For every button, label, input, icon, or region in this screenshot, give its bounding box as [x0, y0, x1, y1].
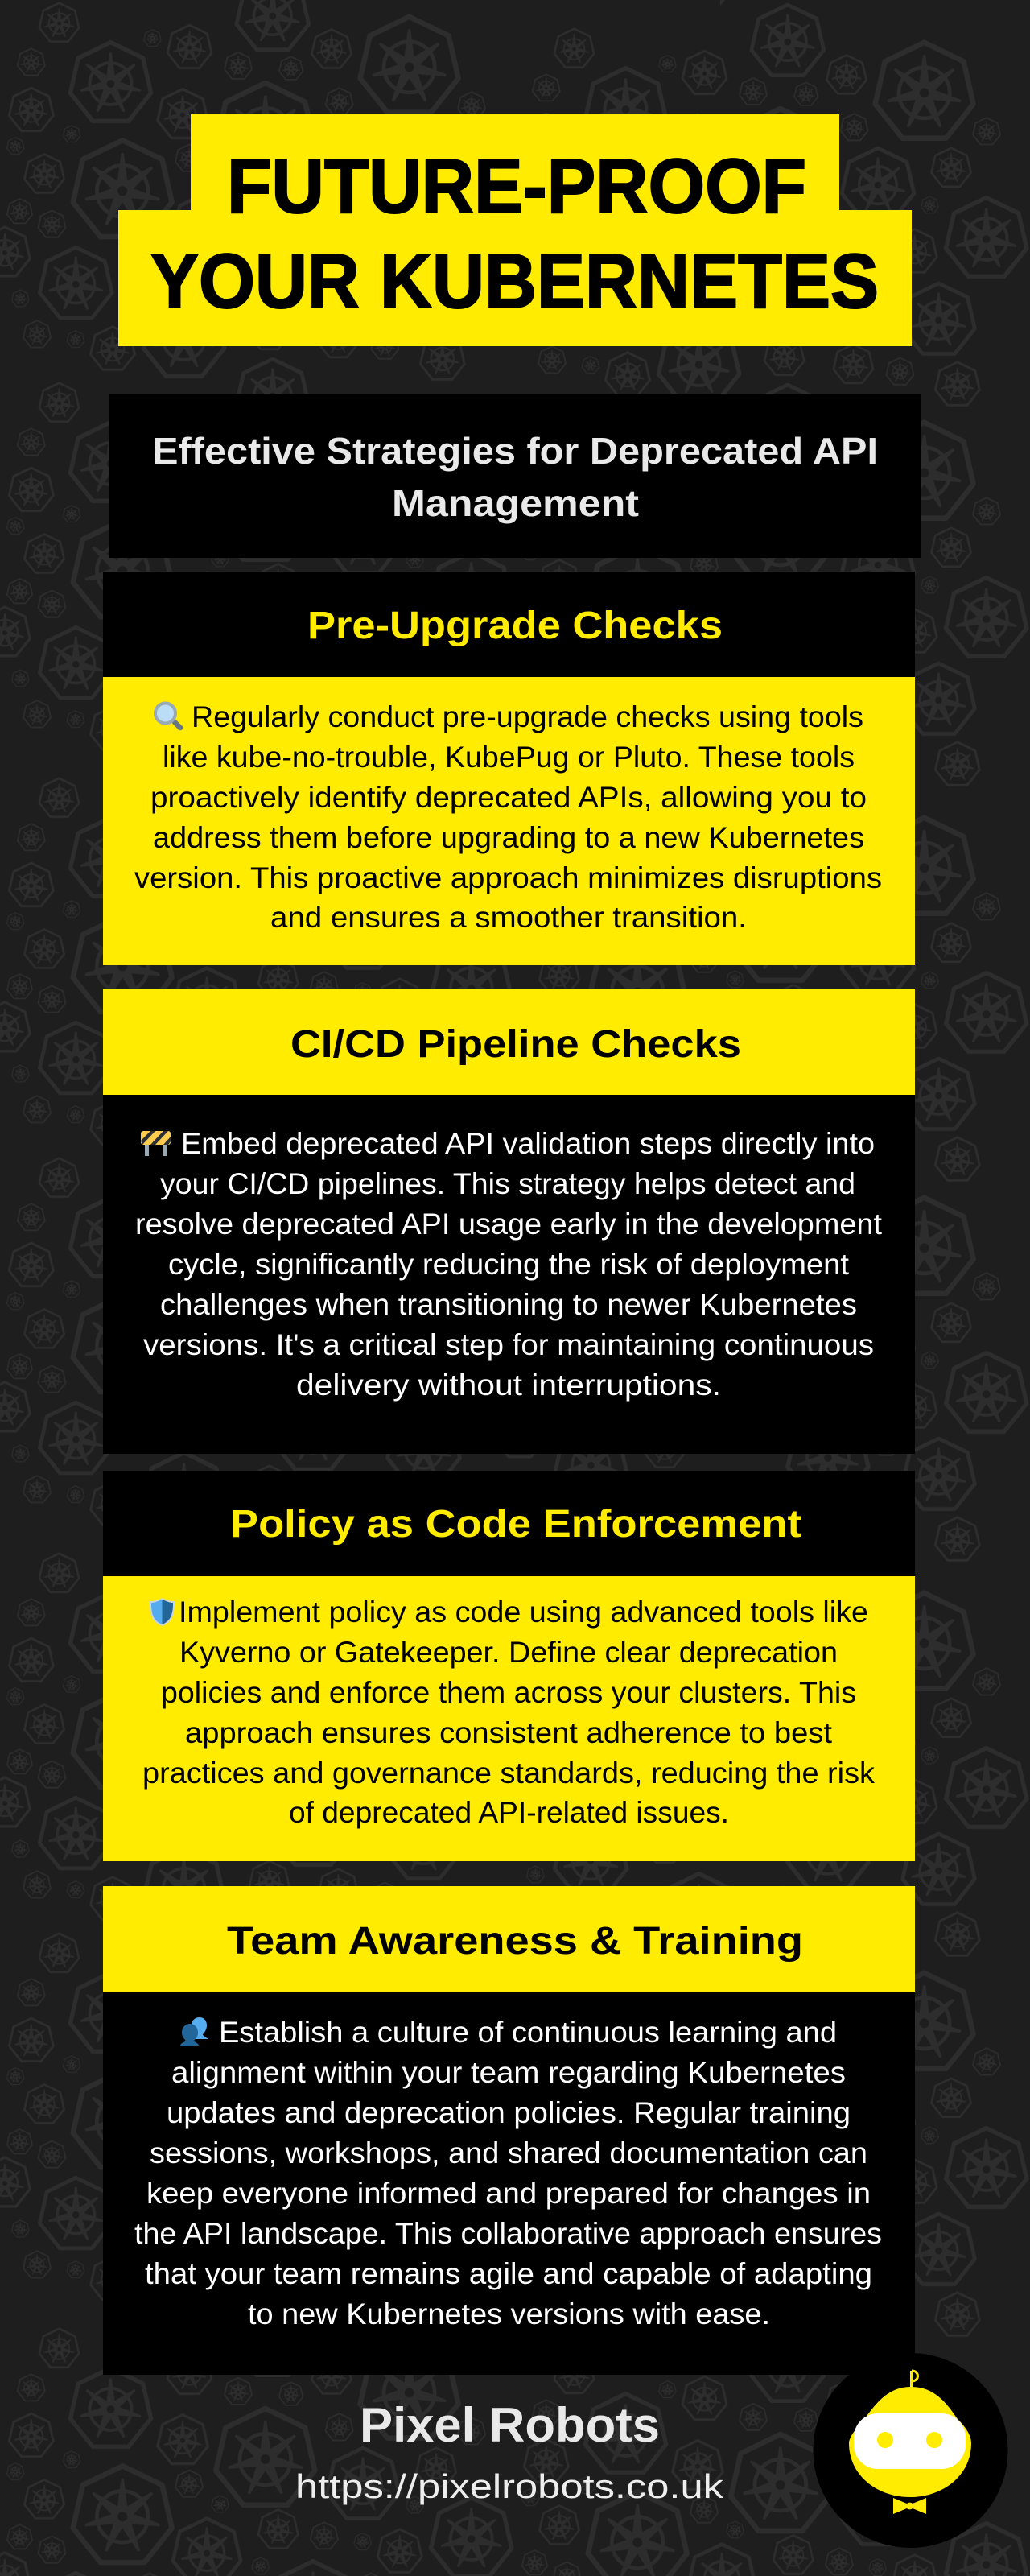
heading: team awareness and training: Team Awareness & Training: [227, 1920, 803, 1963]
text block: policy as code enforcement: Implement policy as code using advanced tools like: [179, 1596, 868, 1629]
panel: pre-upgrade checks: [103, 572, 915, 965]
text block: ci/cd pipeline checks: challenges when transitioning to newer Kubernetes: [160, 1288, 857, 1321]
title: FUTURE-PROOF: [227, 143, 806, 229]
icon: pixel robots robot logo: [813, 2353, 1007, 2548]
subtitle banner: [109, 394, 921, 558]
text block: ci/cd pipeline checks: versions. It's a critical step for maintaining continuous: [143, 1328, 874, 1361]
text block: team awareness and training: to new Kubernetes versions with ease.: [248, 2297, 770, 2330]
panel: team awareness and training: [103, 1886, 915, 2375]
text block: policy as code enforcement: of deprecated API-related issues.: [289, 1796, 729, 1829]
text block: team awareness and training: the API landscape. This collaborative approach ensures: [134, 2217, 882, 2250]
text block: pre-upgrade checks: proactively identify deprecated APIs, allowing you to: [150, 781, 867, 814]
text block: ci/cd pipeline checks: [103, 1095, 915, 1454]
icon: two people silhouettes: [180, 2017, 208, 2046]
text block: ci/cd pipeline checks: resolve deprecated API usage early in the development: [135, 1208, 883, 1241]
text block: policy as code enforcement: practices and governance standards, reducing the risk: [142, 1757, 876, 1790]
text block: policy as code enforcement: Kyverno or Gatekeeper. Define clear deprecation: [179, 1636, 838, 1669]
icon: construction barrier: [141, 1131, 171, 1156]
heading: pre-upgrade checks: [103, 572, 915, 677]
text block: pre-upgrade checks: address them before upgrading to a new Kubernetes: [153, 821, 864, 854]
footer brand name: Pixel Robots: [360, 2398, 660, 2452]
text block: team awareness and training: alignment within your team regarding Kubernetes: [171, 2056, 846, 2089]
heading: ci/cd pipeline checks: CI/CD Pipeline Checks: [290, 1023, 741, 1066]
text block: ci/cd pipeline checks: your CI/CD pipelines. This strategy helps detect and: [160, 1167, 855, 1200]
title: YOUR KUBERNETES: [150, 238, 879, 324]
title: [118, 114, 912, 346]
subtitle banner: Effective Strategies for Deprecated API: [152, 430, 878, 472]
heading: policy as code enforcement: [103, 1471, 915, 1576]
icon: shield: [150, 1598, 175, 1626]
text block: policy as code enforcement: approach ensures consistent adherence to best: [185, 1716, 833, 1749]
text block: pre-upgrade checks: like kube-no-trouble, KubePug or Pluto. These tools: [163, 741, 855, 774]
text block: pre-upgrade checks: Regularly conduct pre-upgrade checks using tools: [192, 700, 863, 733]
text block: pre-upgrade checks: and ensures a smoother transition.: [270, 901, 747, 934]
text block: team awareness and training: that your team remains agile and capable of adapting: [145, 2257, 872, 2290]
text block: ci/cd pipeline checks: delivery without interruptions.: [296, 1368, 721, 1402]
subtitle banner: Management: [392, 482, 639, 524]
text block: team awareness and training: sessions, workshops, and shared documentation can: [150, 2136, 867, 2169]
text block: pre-upgrade checks: version. This proactive approach minimizes disruptions: [134, 861, 882, 894]
text block: pre-upgrade checks: [103, 677, 915, 965]
text block: team awareness and training: keep everyone informed and prepared for changes in: [146, 2177, 871, 2210]
text block: ci/cd pipeline checks: cycle, significantly reducing the risk of deployment: [168, 1248, 850, 1281]
icon: magnifying glass: [155, 704, 180, 728]
heading: ci/cd pipeline checks: [103, 989, 915, 1095]
heading: policy as code enforcement: Policy as Code Enforcement: [230, 1503, 801, 1546]
text block: team awareness and training: Establish a culture of continuous learning and: [219, 2016, 837, 2049]
heading: team awareness and training: [103, 1886, 915, 1992]
panel: policy as code enforcement: [103, 1471, 915, 1861]
text block: team awareness and training: updates and deprecation policies. Regular training: [167, 2096, 851, 2129]
heading: pre-upgrade checks: Pre-Upgrade Checks: [307, 605, 723, 647]
text block: policy as code enforcement: policies and enforce them across your clusters. This: [161, 1676, 856, 1709]
text block: team awareness and training: [103, 1992, 915, 2375]
text block: policy as code enforcement: [103, 1576, 915, 1861]
panel: ci/cd pipeline checks: [103, 989, 915, 1454]
footer url: https://pixelrobots.co.uk: [295, 2467, 724, 2505]
text block: ci/cd pipeline checks: Embed deprecated API validation steps directly into: [181, 1127, 875, 1160]
